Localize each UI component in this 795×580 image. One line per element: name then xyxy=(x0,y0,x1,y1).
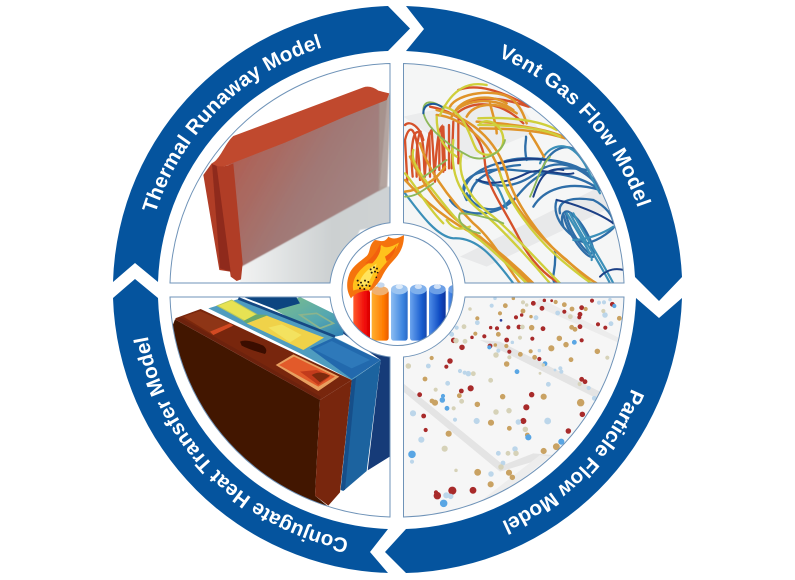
panel: thermal runaway battery xyxy=(170,64,393,285)
blue particles xyxy=(409,304,616,507)
ring segment: Conjugate Heat Transfer Model xyxy=(113,279,388,573)
brown terminal xyxy=(183,311,233,335)
blue streamlines xyxy=(450,137,617,283)
cream particles xyxy=(406,301,609,472)
brown cell top xyxy=(175,309,352,400)
middle cell top with heat map xyxy=(208,299,380,380)
brown cell side xyxy=(315,380,352,506)
panel: vent gas streamlines xyxy=(403,64,627,283)
ring segment: Vent Gas Flow Model xyxy=(406,6,682,301)
tan particles xyxy=(423,297,621,487)
ring segment: Thermal Runaway Model xyxy=(113,6,410,282)
flame xyxy=(347,235,404,298)
center icon: burning battery cells xyxy=(342,234,465,346)
battery cells xyxy=(353,282,465,341)
red and orange vortex streamlines xyxy=(405,87,560,283)
ring segment: Particle Flow Model xyxy=(385,298,682,573)
rear dark blue cell xyxy=(343,331,390,470)
ring segment: Particle Flow Model: Particle Flow Model xyxy=(502,390,644,535)
panel: conjugate heat transfer battery pack xyxy=(150,295,393,517)
soot particles xyxy=(357,266,378,290)
ring segment: Vent Gas Flow Model: Vent Gas Flow Model xyxy=(502,44,652,207)
red particles xyxy=(418,299,614,499)
ring segment: Conjugate Heat Transfer Model: Conjugate Heat Transfer Model xyxy=(133,337,347,552)
panel: particle flow xyxy=(403,297,624,517)
orange terminal xyxy=(276,354,339,391)
ring segment: Thermal Runaway Model: Thermal Runaway Model xyxy=(142,34,321,210)
top edge of the cell xyxy=(212,87,389,167)
vent slot xyxy=(240,341,266,354)
translucent red cell body xyxy=(228,98,387,267)
circular model diagram xyxy=(113,6,682,573)
left column of the cell xyxy=(203,163,243,281)
pale blue particles xyxy=(410,297,613,499)
front brown cell xyxy=(173,320,328,506)
middle blue cell side xyxy=(341,360,381,491)
